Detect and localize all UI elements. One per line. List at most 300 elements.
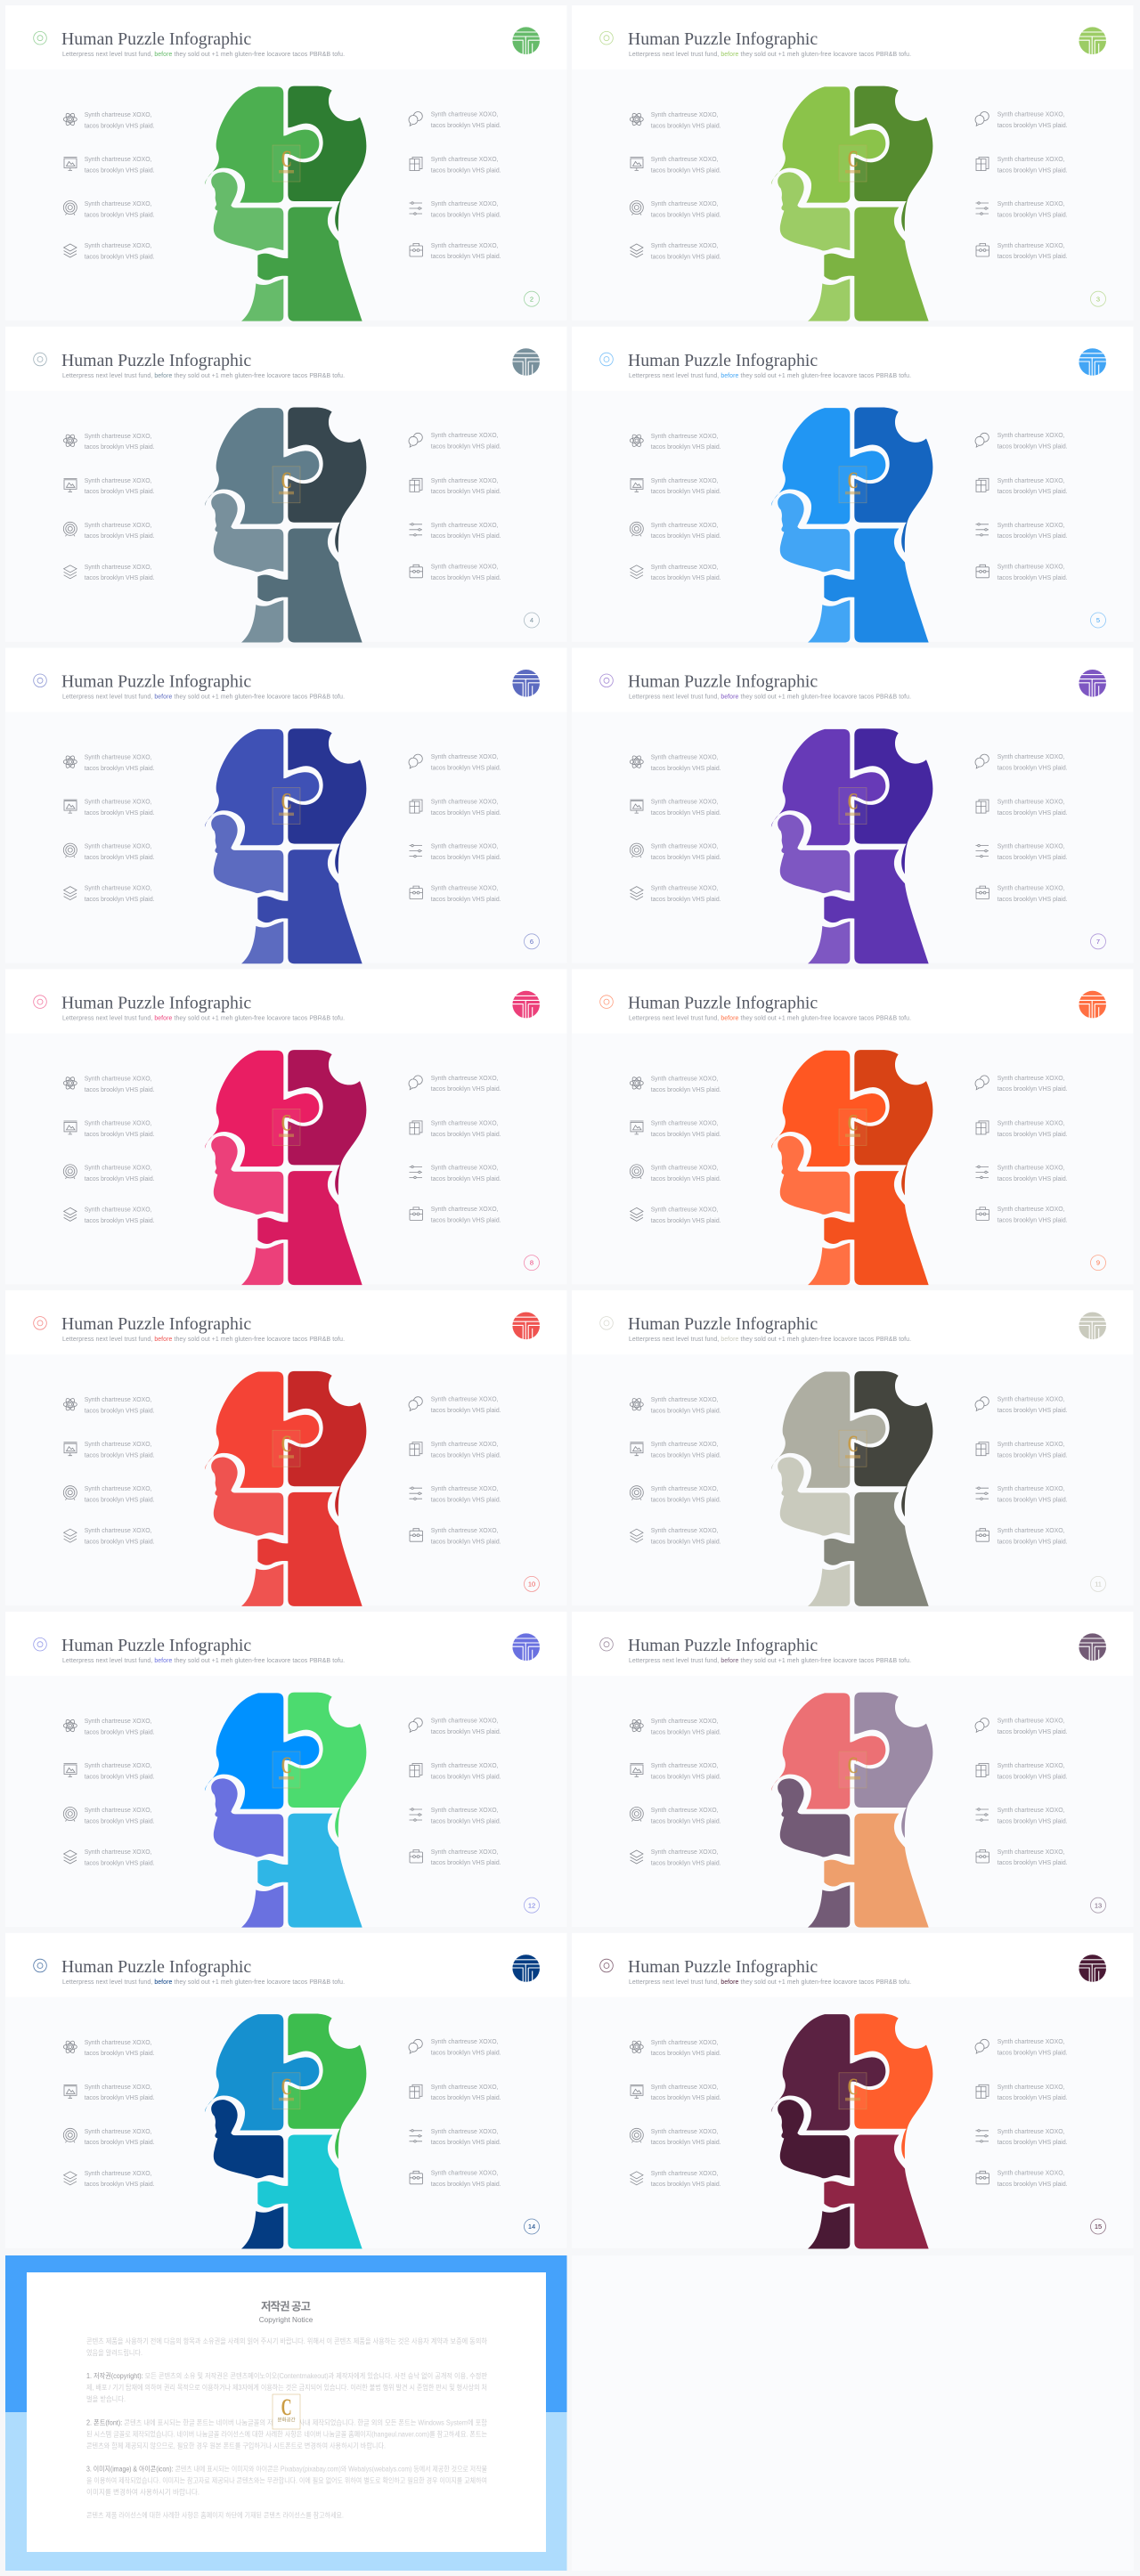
feature text: Synth chartreuse XOXO, [998,800,1065,806]
feature text: Synth chartreuse XOXO, [998,844,1065,850]
panel: slide 6 indigo [5,648,566,963]
logo [512,670,540,698]
logo [1079,1954,1106,1983]
icon: boxes [410,2084,422,2098]
feature text: tacos brooklyn VHS plaid. [85,897,155,903]
feature text: Synth chartreuse XOXO, [85,2084,152,2091]
feature text: tacos brooklyn VHS plaid. [431,1818,501,1824]
watermark [273,1751,300,1788]
text block: intro [86,2336,488,2357]
icon: layers [64,1850,77,1864]
target icon [34,1317,46,1329]
title: Human Puzzle Infographic [61,1314,251,1334]
feature text: Synth chartreuse XOXO, [998,2084,1065,2091]
icon: presentation [64,800,77,813]
feature text: Synth chartreuse XOXO, [998,1076,1065,1082]
page number: 14 [528,2223,535,2231]
feature text: Synth chartreuse XOXO, [651,1442,719,1448]
feature text: Synth chartreuse XOXO, [85,2129,152,2135]
title: Human Puzzle Infographic [628,1636,818,1655]
feature text: tacos brooklyn VHS plaid. [85,1860,155,1866]
feature text: tacos brooklyn VHS plaid. [998,1818,1068,1824]
feature text: Synth chartreuse XOXO, [85,112,152,118]
feature text: tacos brooklyn VHS plaid. [85,212,155,218]
panel: slide 11 neutral grey [572,1290,1133,1606]
icon: sliders [976,1808,989,1821]
feature text: tacos brooklyn VHS plaid. [431,765,501,771]
feature text: tacos brooklyn VHS plaid. [651,1409,721,1415]
icon: layers [631,244,643,257]
feature text: tacos brooklyn VHS plaid. [431,254,501,260]
watermark [839,788,867,825]
icon: atom [630,434,643,448]
feature text: Synth chartreuse XOXO, [85,1120,152,1126]
title: Human Puzzle Infographic [628,993,818,1012]
page number: 6 [530,938,533,946]
icon: chat [975,2039,989,2053]
feature text: tacos brooklyn VHS plaid. [431,1774,501,1780]
icon: briefcase [976,565,989,578]
feature text: Synth chartreuse XOXO, [998,433,1065,439]
icon: chat [975,1076,989,1090]
feature text: Synth chartreuse XOXO, [998,1486,1065,1492]
icon: boxes [410,1442,422,1456]
feature text: tacos brooklyn VHS plaid. [998,897,1068,903]
feature text: Synth chartreuse XOXO, [651,2084,719,2091]
feature text: Synth chartreuse XOXO, [651,2129,719,2135]
feature text: Synth chartreuse XOXO, [431,1120,499,1126]
feature text: Synth chartreuse XOXO, [431,243,499,249]
feature text: Synth chartreuse XOXO, [431,2039,499,2045]
subtitle: Letterpress next level trust fund, before they sold out +1 meh gluten-free locavore tacos PBR&B tofu. [629,1979,911,1986]
feature text: Synth chartreuse XOXO, [431,523,499,529]
icon: presentation [64,1442,77,1456]
feature text: tacos brooklyn VHS plaid. [85,167,155,174]
panel: slide 15 multicolour plum orange [572,1933,1133,2248]
text block: image and icon: 을 이용하여 제작되었습니다. 이미지는 참고자료 제공되나 콘텐츠와는 무관합니다. 이에 필요 없어도 위하여 별도로 확인하고 필요한 경우 이미지를 교체하여 [86,2475,487,2484]
feature text: Synth chartreuse XOXO, [998,565,1065,571]
feature text: Synth chartreuse XOXO, [85,523,152,529]
feature text: tacos brooklyn VHS plaid. [998,1176,1068,1182]
page number [1090,1897,1106,1913]
feature text: Synth chartreuse XOXO, [431,1207,499,1213]
watermark [273,1109,300,1145]
feature text: Synth chartreuse XOXO, [998,885,1065,891]
title: Human Puzzle Infographic [61,351,251,370]
text block: copyright: 1. 저작권(copyright): 모든 콘텐츠의 소유 및 저작권은 콘텐츠메이노이오(Contentmakeout)과 제작자에게 있습니다. 사전 승낙 없이 공개적 이용, 수정판 [86,2371,488,2380]
title: Human Puzzle Infographic [61,1957,251,1977]
icon: layers [64,1207,77,1221]
icon: atom [63,1076,77,1090]
feature text: Synth chartreuse XOXO, [998,111,1065,118]
feature text: tacos brooklyn VHS plaid. [998,855,1068,861]
subtitle: Letterpress next level trust fund, before they sold out +1 meh gluten-free locavore tacos PBR&B tofu. [62,1658,345,1664]
feature text: Synth chartreuse XOXO, [431,1076,499,1082]
feature text: Synth chartreuse XOXO, [431,2129,499,2135]
feature text: tacos brooklyn VHS plaid. [85,1729,155,1735]
watermark [839,1430,867,1467]
feature text: Synth chartreuse XOXO, [998,2039,1065,2045]
icon: boxes [410,157,422,171]
watermark: C [848,1431,859,1457]
icon: presentation [631,478,643,492]
puzzle head [771,407,932,642]
feature text: Synth chartreuse XOXO, [651,157,719,163]
page number: 11 [1095,1580,1102,1588]
logo [512,348,540,377]
icon: boxes [976,2084,989,2098]
icon: presentation [631,1442,643,1456]
feature text: tacos brooklyn VHS plaid. [651,1176,721,1182]
page number [1090,613,1106,628]
icon: atom [630,1076,643,1090]
page number: 2 [530,295,533,303]
feature text: tacos brooklyn VHS plaid. [431,2182,501,2188]
feature text: Synth chartreuse XOXO, [431,844,499,850]
feature text: tacos brooklyn VHS plaid. [85,1540,155,1546]
feature text: Synth chartreuse XOXO, [651,1397,719,1403]
page number [524,1897,540,1913]
icon: target [630,2128,643,2142]
watermark [273,145,300,182]
feature text: Synth chartreuse XOXO, [85,1397,152,1403]
watermark [839,1751,867,1788]
feature text: Synth chartreuse XOXO, [431,800,499,806]
icon: briefcase [410,244,422,256]
logo [512,1954,540,1983]
icon: atom [63,112,77,126]
icon: briefcase [976,1207,989,1220]
target icon [34,31,46,45]
feature text: Synth chartreuse XOXO, [998,523,1065,529]
feature text: Synth chartreuse XOXO, [998,478,1065,484]
feature text: Synth chartreuse XOXO, [998,1207,1065,1213]
puzzle head [771,1050,932,1285]
panel: slide 4 blue grey [5,327,566,642]
panel: slide 3 light green [572,5,1133,321]
feature text: tacos brooklyn VHS plaid. [651,575,721,581]
icon: layers [64,887,77,900]
icon: presentation [64,2084,77,2098]
subtitle: Letterpress next level trust fund, before they sold out +1 meh gluten-free locavore tacos PBR&B tofu. [629,373,911,379]
feature text: tacos brooklyn VHS plaid. [998,489,1068,495]
feature text: tacos brooklyn VHS plaid. [431,1176,501,1182]
target icon [34,995,46,1008]
target icon [600,1637,613,1651]
feature text: tacos brooklyn VHS plaid. [651,2095,721,2101]
feature text: tacos brooklyn VHS plaid. [998,575,1068,581]
watermark: C [848,1752,859,1778]
feature text: Synth chartreuse XOXO, [651,1849,719,1856]
text block: font [86,2418,488,2450]
subtitle: Letterpress next level trust fund, before they sold out +1 meh gluten-free locavore tacos PBR&B tofu. [629,52,911,58]
feature text: Synth chartreuse XOXO, [431,1808,499,1814]
icon: target [63,2128,77,2142]
text block: license note: 콘텐츠 제품 라이선스에 대한 사례한 사항은 홈페이지 하단에 기재된 콘텐츠 라이선스를 참고하세요. [86,2511,344,2520]
feature text: tacos brooklyn VHS plaid. [85,1132,155,1138]
feature text: Synth chartreuse XOXO, [651,1528,719,1534]
feature text: tacos brooklyn VHS plaid. [651,1087,721,1093]
watermark: C [281,1431,292,1457]
feature text: tacos brooklyn VHS plaid. [998,254,1068,260]
feature text: tacos brooklyn VHS plaid. [651,2182,721,2188]
feature text: Synth chartreuse XOXO, [651,1076,719,1082]
icon: boxes [976,157,989,171]
feature text: tacos brooklyn VHS plaid. [998,167,1068,174]
feature text: tacos brooklyn VHS plaid. [431,1539,501,1545]
feature text: tacos brooklyn VHS plaid. [85,1176,155,1182]
icon: presentation [64,158,77,171]
heading: copyright notice: Copyright Notice [259,2316,314,2324]
feature text: tacos brooklyn VHS plaid. [431,810,501,817]
feature text: tacos brooklyn VHS plaid. [651,766,721,772]
target icon [34,1959,46,1972]
icon: presentation [64,1121,77,1134]
puzzle head [205,1693,366,1928]
feature text: Synth chartreuse XOXO, [998,1442,1065,1448]
target icon [600,31,613,45]
feature text: Synth chartreuse XOXO, [85,1763,152,1769]
feature text: tacos brooklyn VHS plaid. [998,444,1068,451]
feature text: tacos brooklyn VHS plaid. [651,489,721,495]
feature text: Synth chartreuse XOXO, [651,565,719,571]
icon: boxes [410,478,422,492]
feature text: tacos brooklyn VHS plaid. [998,765,1068,771]
feature text: tacos brooklyn VHS plaid. [431,575,501,581]
icon: sliders [410,524,422,536]
icon: target [630,1165,643,1179]
icon: target [63,1165,77,1179]
feature text: tacos brooklyn VHS plaid. [651,2051,721,2057]
text block: copyright: 제, 배포 / 기기 탑재에 의하여 권리 목적으로 이용하거나 제3자에게 이용하는 것은 금지되어 있습니다. 이러한 불법 행위 발견 시 준엄한 판시 및 형사상의 처 [86,2383,487,2392]
feature text: Synth chartreuse XOXO, [85,1442,152,1448]
feature text: Synth chartreuse XOXO, [998,1849,1065,1856]
target icon [600,353,613,366]
feature text: Synth chartreuse XOXO, [85,1165,152,1171]
logo [512,991,540,1019]
feature text: tacos brooklyn VHS plaid. [651,1774,721,1780]
icon: atom [63,2040,77,2054]
page number [524,613,540,628]
icon: atom [630,755,643,769]
feature text: tacos brooklyn VHS plaid. [85,2095,155,2101]
feature text: Synth chartreuse XOXO, [651,201,719,207]
panel: slide 9 deep orange [572,969,1133,1285]
feature text: tacos brooklyn VHS plaid. [85,254,155,260]
icon: briefcase [410,1529,422,1541]
text block: intro: 였음을 알려드립니다. [86,2348,142,2357]
watermark: C [281,2074,292,2100]
feature text: tacos brooklyn VHS plaid. [431,1408,501,1414]
feature text: tacos brooklyn VHS plaid. [651,212,721,218]
feature text: tacos brooklyn VHS plaid. [431,533,501,540]
feature text: tacos brooklyn VHS plaid. [998,2182,1068,2188]
feature text: Synth chartreuse XOXO, [431,1528,499,1534]
subtitle: Letterpress next level trust fund, before they sold out +1 meh gluten-free locavore tacos PBR&B tofu. [629,1337,911,1343]
feature text: Synth chartreuse XOXO, [998,1763,1065,1769]
icon: target [63,843,77,857]
title: Human Puzzle Infographic [628,29,818,49]
title: Human Puzzle Infographic [628,1957,818,1977]
watermark: C [848,2074,859,2100]
feature text: tacos brooklyn VHS plaid. [651,1818,721,1824]
title: Human Puzzle Infographic [628,351,818,370]
page number: 8 [530,1259,533,1267]
icon: target [63,522,77,536]
feature text: Synth chartreuse XOXO, [431,1718,499,1724]
feature text: tacos brooklyn VHS plaid. [85,1774,155,1780]
page number [524,291,540,306]
watermark: C [848,1109,859,1135]
icon: layers [631,2172,643,2185]
feature text: tacos brooklyn VHS plaid. [85,533,155,540]
feature text: Synth chartreuse XOXO, [431,157,499,163]
feature text: tacos brooklyn VHS plaid. [651,1860,721,1866]
feature text: tacos brooklyn VHS plaid. [998,1498,1068,1504]
panel: slide 13 multicolour coral mauve [572,1612,1133,1928]
feature text: tacos brooklyn VHS plaid. [85,444,155,451]
icon: boxes [976,1763,989,1777]
puzzle head [205,1050,366,1285]
feature text: tacos brooklyn VHS plaid. [998,1729,1068,1735]
feature text: tacos brooklyn VHS plaid. [998,1539,1068,1545]
feature text: tacos brooklyn VHS plaid. [85,766,155,772]
page number: 3 [1096,295,1100,303]
watermark: C [281,467,292,493]
icon: chat [975,1397,989,1410]
feature text: tacos brooklyn VHS plaid. [998,1453,1068,1459]
icon: layers [631,565,643,579]
icon: chat [409,1397,422,1410]
icon: briefcase [976,2171,989,2184]
icon: chat [975,1719,989,1732]
feature text: tacos brooklyn VHS plaid. [651,167,721,174]
icon: sliders [410,1487,422,1499]
feature text: Synth chartreuse XOXO, [431,433,499,439]
text block: image and icon: 3. 이미지(image) & 아이콘(icon): 콘텐츠 내에 표시되는 이미지와 아이콘은 Pixabay(pixabay.com)와 Webalys(webalys.com) 등에서 제공한 것으로 저작물 [86,2465,487,2474]
title: Human Puzzle Infographic [628,1314,818,1334]
icon: atom [630,1719,643,1733]
text block: image and icon [86,2465,487,2497]
feature text: tacos brooklyn VHS plaid. [998,533,1068,540]
text block: image and icon: 이미지를 변경하여 사용하시기 바랍니다. [86,2488,200,2497]
feature text: tacos brooklyn VHS plaid. [651,1729,721,1735]
icon: layers [631,1207,643,1221]
icon: briefcase [410,886,422,899]
icon: atom [630,2040,643,2054]
page number [1090,2219,1106,2234]
feature text: tacos brooklyn VHS plaid. [431,2051,501,2057]
feature text: Synth chartreuse XOXO, [85,1076,152,1082]
text block: font: 2. 폰트(font): 콘텐츠 내에 표시되는 한글 폰트는 네이버 나눔글꼴의 저작권으로 사내 제작되었습니다. 한글 외의 모든 폰트는 Windows System에 포함 [86,2418,488,2427]
feature text: tacos brooklyn VHS plaid. [998,810,1068,817]
text block: copyright [86,2371,488,2403]
icon: layers [631,887,643,900]
feature text: tacos brooklyn VHS plaid. [998,123,1068,129]
icon: atom [630,112,643,126]
icon: sliders [976,202,989,215]
feature text: Synth chartreuse XOXO, [85,157,152,163]
icon: sliders [976,1487,989,1499]
feature text: tacos brooklyn VHS plaid. [431,212,501,218]
feature text: tacos brooklyn VHS plaid. [85,1453,155,1459]
icon: sliders [976,2130,989,2142]
feature text: Synth chartreuse XOXO, [431,565,499,571]
icon: briefcase [976,1850,989,1863]
feature text: tacos brooklyn VHS plaid. [431,1218,501,1224]
watermark [839,467,867,503]
target icon [600,1317,613,1329]
icon: atom [63,434,77,448]
feature text: tacos brooklyn VHS plaid. [651,1540,721,1546]
feature text: Synth chartreuse XOXO, [998,1397,1065,1403]
feature text: Synth chartreuse XOXO, [431,1849,499,1856]
feature text: Synth chartreuse XOXO, [85,755,152,761]
feature text: Synth chartreuse XOXO, [998,1528,1065,1534]
feature text: tacos brooklyn VHS plaid. [998,1132,1068,1138]
logo [512,1312,540,1340]
heading: copyright notice: 저작권 공고 [261,2299,311,2313]
feature text: tacos brooklyn VHS plaid. [431,897,501,903]
icon: boxes [976,1442,989,1456]
page number [524,1255,540,1271]
feature text: tacos brooklyn VHS plaid. [651,897,721,903]
title: Human Puzzle Infographic [61,672,251,692]
watermark [273,788,300,825]
feature text: Synth chartreuse XOXO, [651,2040,719,2046]
panel: slide 2 green [5,5,566,321]
feature text: tacos brooklyn VHS plaid. [431,1086,501,1093]
feature text: tacos brooklyn VHS plaid. [998,1860,1068,1866]
feature text: Synth chartreuse XOXO, [651,523,719,529]
puzzle head [205,407,366,642]
feature text: Synth chartreuse XOXO, [431,2171,499,2177]
feature text: tacos brooklyn VHS plaid. [651,1132,721,1138]
feature text: Synth chartreuse XOXO, [85,478,152,484]
feature text: tacos brooklyn VHS plaid. [431,855,501,861]
icon: briefcase [410,1850,422,1863]
feature text: Synth chartreuse XOXO, [651,1486,719,1492]
heading: copyright notice [259,2299,314,2324]
feature text: Synth chartreuse XOXO, [651,800,719,806]
feature text: Synth chartreuse XOXO, [431,2084,499,2091]
feature text: tacos brooklyn VHS plaid. [431,1132,501,1138]
feature text: tacos brooklyn VHS plaid. [998,2051,1068,2057]
feature text: Synth chartreuse XOXO, [651,844,719,850]
icon: briefcase [976,1529,989,1541]
icon: sliders [410,844,422,857]
icon: chat [409,1076,422,1090]
feature text: tacos brooklyn VHS plaid. [85,575,155,581]
feature text: tacos brooklyn VHS plaid. [651,1453,721,1459]
subtitle: Letterpress next level trust fund, before they sold out +1 meh gluten-free locavore tacos PBR&B tofu. [629,695,911,701]
feature text: tacos brooklyn VHS plaid. [998,2095,1068,2101]
feature text: Synth chartreuse XOXO, [431,1165,499,1171]
page number [1090,1576,1106,1591]
feature text: Synth chartreuse XOXO, [998,201,1065,207]
watermark [273,1430,300,1467]
feature text: tacos brooklyn VHS plaid. [998,1774,1068,1780]
feature text: Synth chartreuse XOXO, [85,886,152,892]
logo [512,1633,540,1662]
icon: chat [975,433,989,447]
icon: layers [64,1529,77,1542]
logo [1079,991,1106,1019]
feature text: tacos brooklyn VHS plaid. [431,1729,501,1735]
watermark: C [281,1752,292,1778]
icon: chat [409,2039,422,2053]
feature text: Synth chartreuse XOXO, [85,800,152,806]
